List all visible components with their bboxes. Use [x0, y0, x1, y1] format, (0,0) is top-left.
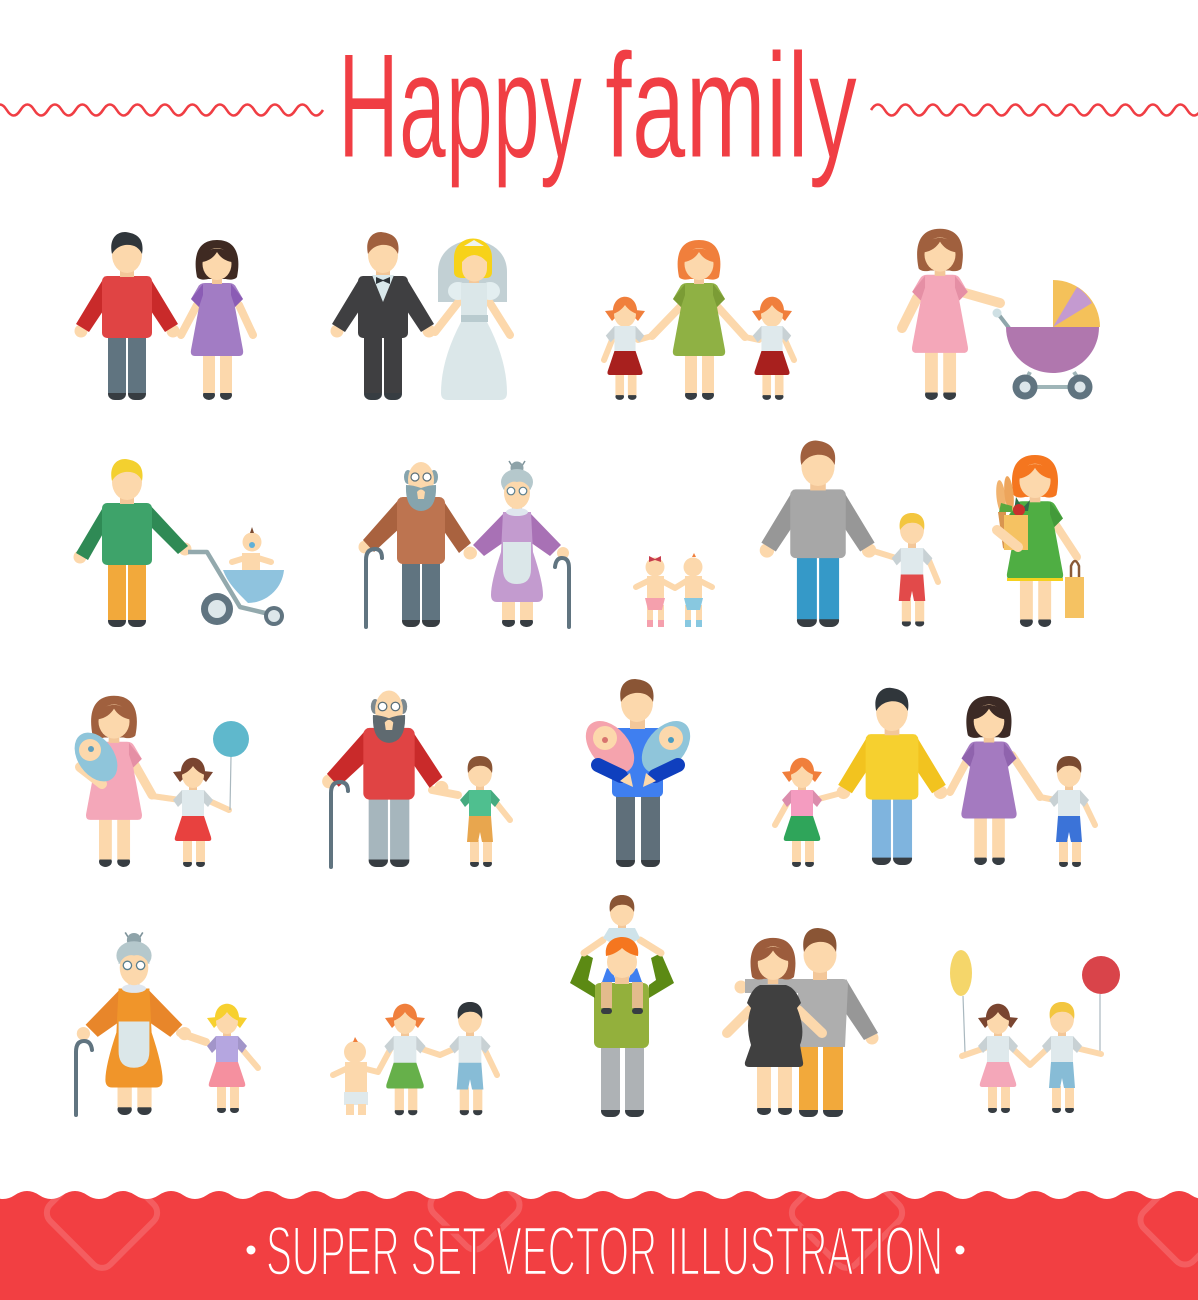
- left wavy divider: [0, 104, 323, 116]
- family of four: [775, 688, 1095, 867]
- three siblings: [333, 1002, 497, 1115]
- two children with balloons: [950, 950, 1120, 1113]
- title: family: [605, 22, 857, 189]
- bottom banner: [0, 1191, 1198, 1300]
- mother in green with two daughters: [604, 240, 794, 400]
- father in green with baby stroller: [74, 459, 284, 627]
- expecting couple: [727, 928, 878, 1117]
- bride and groom: [330, 232, 510, 400]
- father in grey with son: [760, 441, 938, 627]
- grandparents with canes: [358, 461, 569, 627]
- grandfather in red with grandson: [322, 690, 510, 867]
- mother with baby and daughter with balloon: [66, 696, 249, 867]
- father with son on shoulders: [570, 895, 674, 1117]
- grandmother in orange with granddaughter: [76, 932, 258, 1115]
- right wavy divider: [871, 104, 1198, 116]
- father carrying twin babies: [576, 679, 700, 867]
- mother with groceries: [995, 455, 1084, 627]
- couple: man in red and woman in purple: [74, 232, 253, 400]
- twin babies: [636, 553, 712, 627]
- title: Happy: [338, 22, 582, 189]
- mother in pink with pram: [902, 229, 1100, 400]
